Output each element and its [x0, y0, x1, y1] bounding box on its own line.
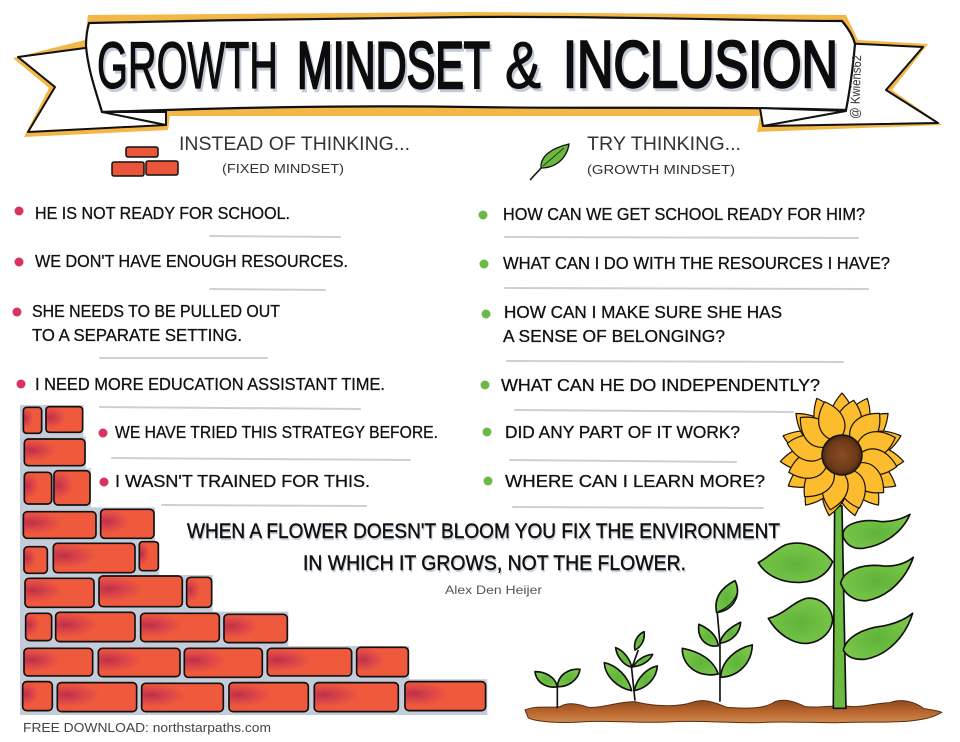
item 3: A SENSE OF BELONGING?: [503, 326, 725, 346]
growth mindset list: [478, 204, 890, 491]
wall shadow: [20, 405, 487, 715]
item 3: TO A SEPARATE SETTING.: [32, 325, 242, 345]
item 5: DID ANY PART OF IT WORK?: [505, 422, 740, 442]
front petals: [785, 398, 899, 512]
seedling: [535, 669, 580, 708]
sunflower head: [779, 393, 905, 518]
item 4: WHAT CAN HE DO INDEPENDENTLY?: [501, 375, 820, 395]
quote text: [187, 520, 780, 575]
plants growth sequence: [525, 506, 942, 723]
title: INCLUSION: [563, 27, 838, 101]
item 2: WHAT CAN I DO WITH THE RESOURCES I HAVE?: [503, 253, 890, 273]
title: GROWTH: [97, 28, 278, 102]
title: [97, 27, 838, 102]
item 6: I WASN'T TRAINED FOR THIS.: [115, 471, 370, 491]
banner: [13, 12, 942, 137]
title: &: [505, 28, 541, 102]
banner folds: [102, 108, 846, 126]
icon: bricks: [112, 147, 178, 176]
column header: fixed mindset: [112, 134, 410, 176]
item 3: SHE NEEDS TO BE PULLED OUT: [32, 301, 280, 321]
subheading: growth mindset: (GROWTH MINDSET): [587, 162, 735, 177]
author credit: @ Kwiens62: [847, 55, 864, 119]
flower centre: [822, 435, 862, 475]
item 3: [12, 301, 280, 345]
young plant: [604, 632, 657, 701]
banner right tail: [760, 43, 938, 126]
footer download link: FREE DOWNLOAD: northstarpaths.com: [23, 721, 271, 735]
soil: [525, 700, 942, 723]
item 1: HOW CAN WE GET SCHOOL READY FOR HIM?: [503, 204, 865, 224]
banner yellow backing: [13, 12, 942, 137]
quote attribution: Alex Den Heijer: [445, 583, 542, 597]
item 2: WE DON'T HAVE ENOUGH RESOURCES.: [35, 251, 348, 271]
item 3: [482, 302, 782, 346]
heading: try thinking: TRY THINKING...: [587, 134, 741, 155]
quote text: WHEN A FLOWER DOESN'T BLOOM YOU FIX THE ENVIRONMENT: [187, 520, 780, 543]
back petals: [779, 393, 905, 518]
stem leaves: [758, 514, 913, 659]
bricks: [23, 407, 486, 712]
column header: growth mindset: [530, 134, 741, 180]
banner left tail: [18, 46, 166, 132]
heading: instead of thinking: INSTEAD OF THINKING...: [179, 134, 410, 155]
quote: [187, 520, 780, 597]
banner main ribbon: [86, 17, 855, 112]
quote text: IN WHICH IT GROWS, NOT THE FLOWER.: [303, 552, 686, 575]
taller plant: [682, 581, 752, 702]
item 4: I NEED MORE EDUCATION ASSISTANT TIME.: [35, 374, 385, 394]
sunflower stem and leaves: [758, 506, 913, 708]
subheading: fixed mindset: (FIXED MINDSET): [222, 161, 344, 176]
item 6: WHERE CAN I LEARN MORE?: [505, 471, 765, 491]
icon: leaf: [530, 144, 569, 180]
stem: [833, 506, 846, 708]
item 5: WE HAVE TRIED THIS STRATEGY BEFORE.: [115, 422, 438, 442]
fixed mindset list: [12, 203, 438, 491]
title: MINDSET: [297, 28, 490, 102]
brick wall: [20, 405, 487, 715]
item 3: HOW CAN I MAKE SURE SHE HAS: [504, 302, 782, 322]
item 1: HE IS NOT READY FOR SCHOOL.: [35, 203, 290, 223]
